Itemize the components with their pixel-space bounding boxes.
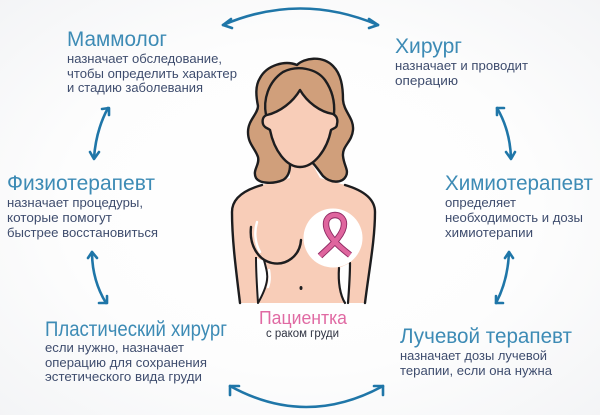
arrow: chemotherapist to radiotherapist	[496, 252, 513, 303]
block: surgeon	[395, 35, 528, 88]
block: chemotherapist: Химиотерапевт	[445, 172, 593, 195]
block: physiotherapist: Физиотерапевт	[7, 172, 155, 195]
block: radiotherapist: назначает дозы лучевой	[400, 348, 547, 363]
block: plastic surgeon: операцию для сохранения	[45, 355, 207, 370]
hair	[248, 59, 353, 183]
body	[232, 160, 375, 303]
patient figure	[232, 59, 375, 303]
breast line	[251, 227, 301, 264]
block: radiotherapist	[400, 325, 572, 378]
block: mammologist: и стадию заболевания	[67, 80, 203, 95]
arm gap right	[339, 263, 350, 303]
block: physiotherapist: назначает процедуры,	[7, 195, 143, 210]
block: plastic surgeon: если нужно, назначает	[45, 340, 184, 355]
block: radiotherapist: терапии, если она нужна	[400, 363, 553, 378]
navel	[300, 286, 302, 290]
arrow: surgeon to chemotherapist	[497, 108, 515, 159]
block: physiotherapist: которые помогут	[7, 210, 112, 225]
block: plastic surgeon: эстетического вида груди	[45, 369, 202, 384]
arrow: top	[223, 8, 378, 28]
block: chemotherapist: необходимость и дозы	[445, 210, 583, 225]
block: mammologist	[67, 28, 237, 95]
block: mammologist: чтобы определить характер	[67, 66, 237, 81]
block: patient caption: с раком груди	[266, 328, 339, 340]
block: surgeon: назначает и проводит	[395, 58, 528, 73]
block: radiotherapist: Лучевой терапевт	[400, 325, 572, 348]
block: physiotherapist	[7, 172, 158, 240]
hair fringe line	[265, 68, 334, 115]
block: patient caption	[259, 308, 348, 340]
arrow: mammologist to physiotherapist	[90, 108, 109, 159]
block: patient caption: Пациентка	[259, 308, 348, 328]
scar marks	[255, 222, 270, 287]
arm gap left	[256, 257, 267, 303]
block: plastic surgeon	[45, 318, 227, 384]
block: mammologist: назначает обследование,	[67, 51, 222, 66]
block: plastic surgeon: Пластический хирург	[45, 318, 227, 341]
block: chemotherapist: определяет	[445, 195, 516, 210]
block: chemotherapist	[445, 172, 593, 240]
block: surgeon: операцию	[395, 73, 458, 88]
arrow: bottom	[230, 386, 383, 407]
arrow: physiotherapist to plastic surgeon	[88, 252, 107, 303]
block: surgeon: Хирург	[395, 35, 462, 58]
block: chemotherapist: химиотерапии	[445, 225, 533, 240]
block: physiotherapist: быстрее восстановиться	[7, 225, 158, 240]
ribbon badge	[304, 208, 362, 268]
block: mammologist: Маммолог	[67, 28, 167, 51]
face	[263, 90, 337, 167]
